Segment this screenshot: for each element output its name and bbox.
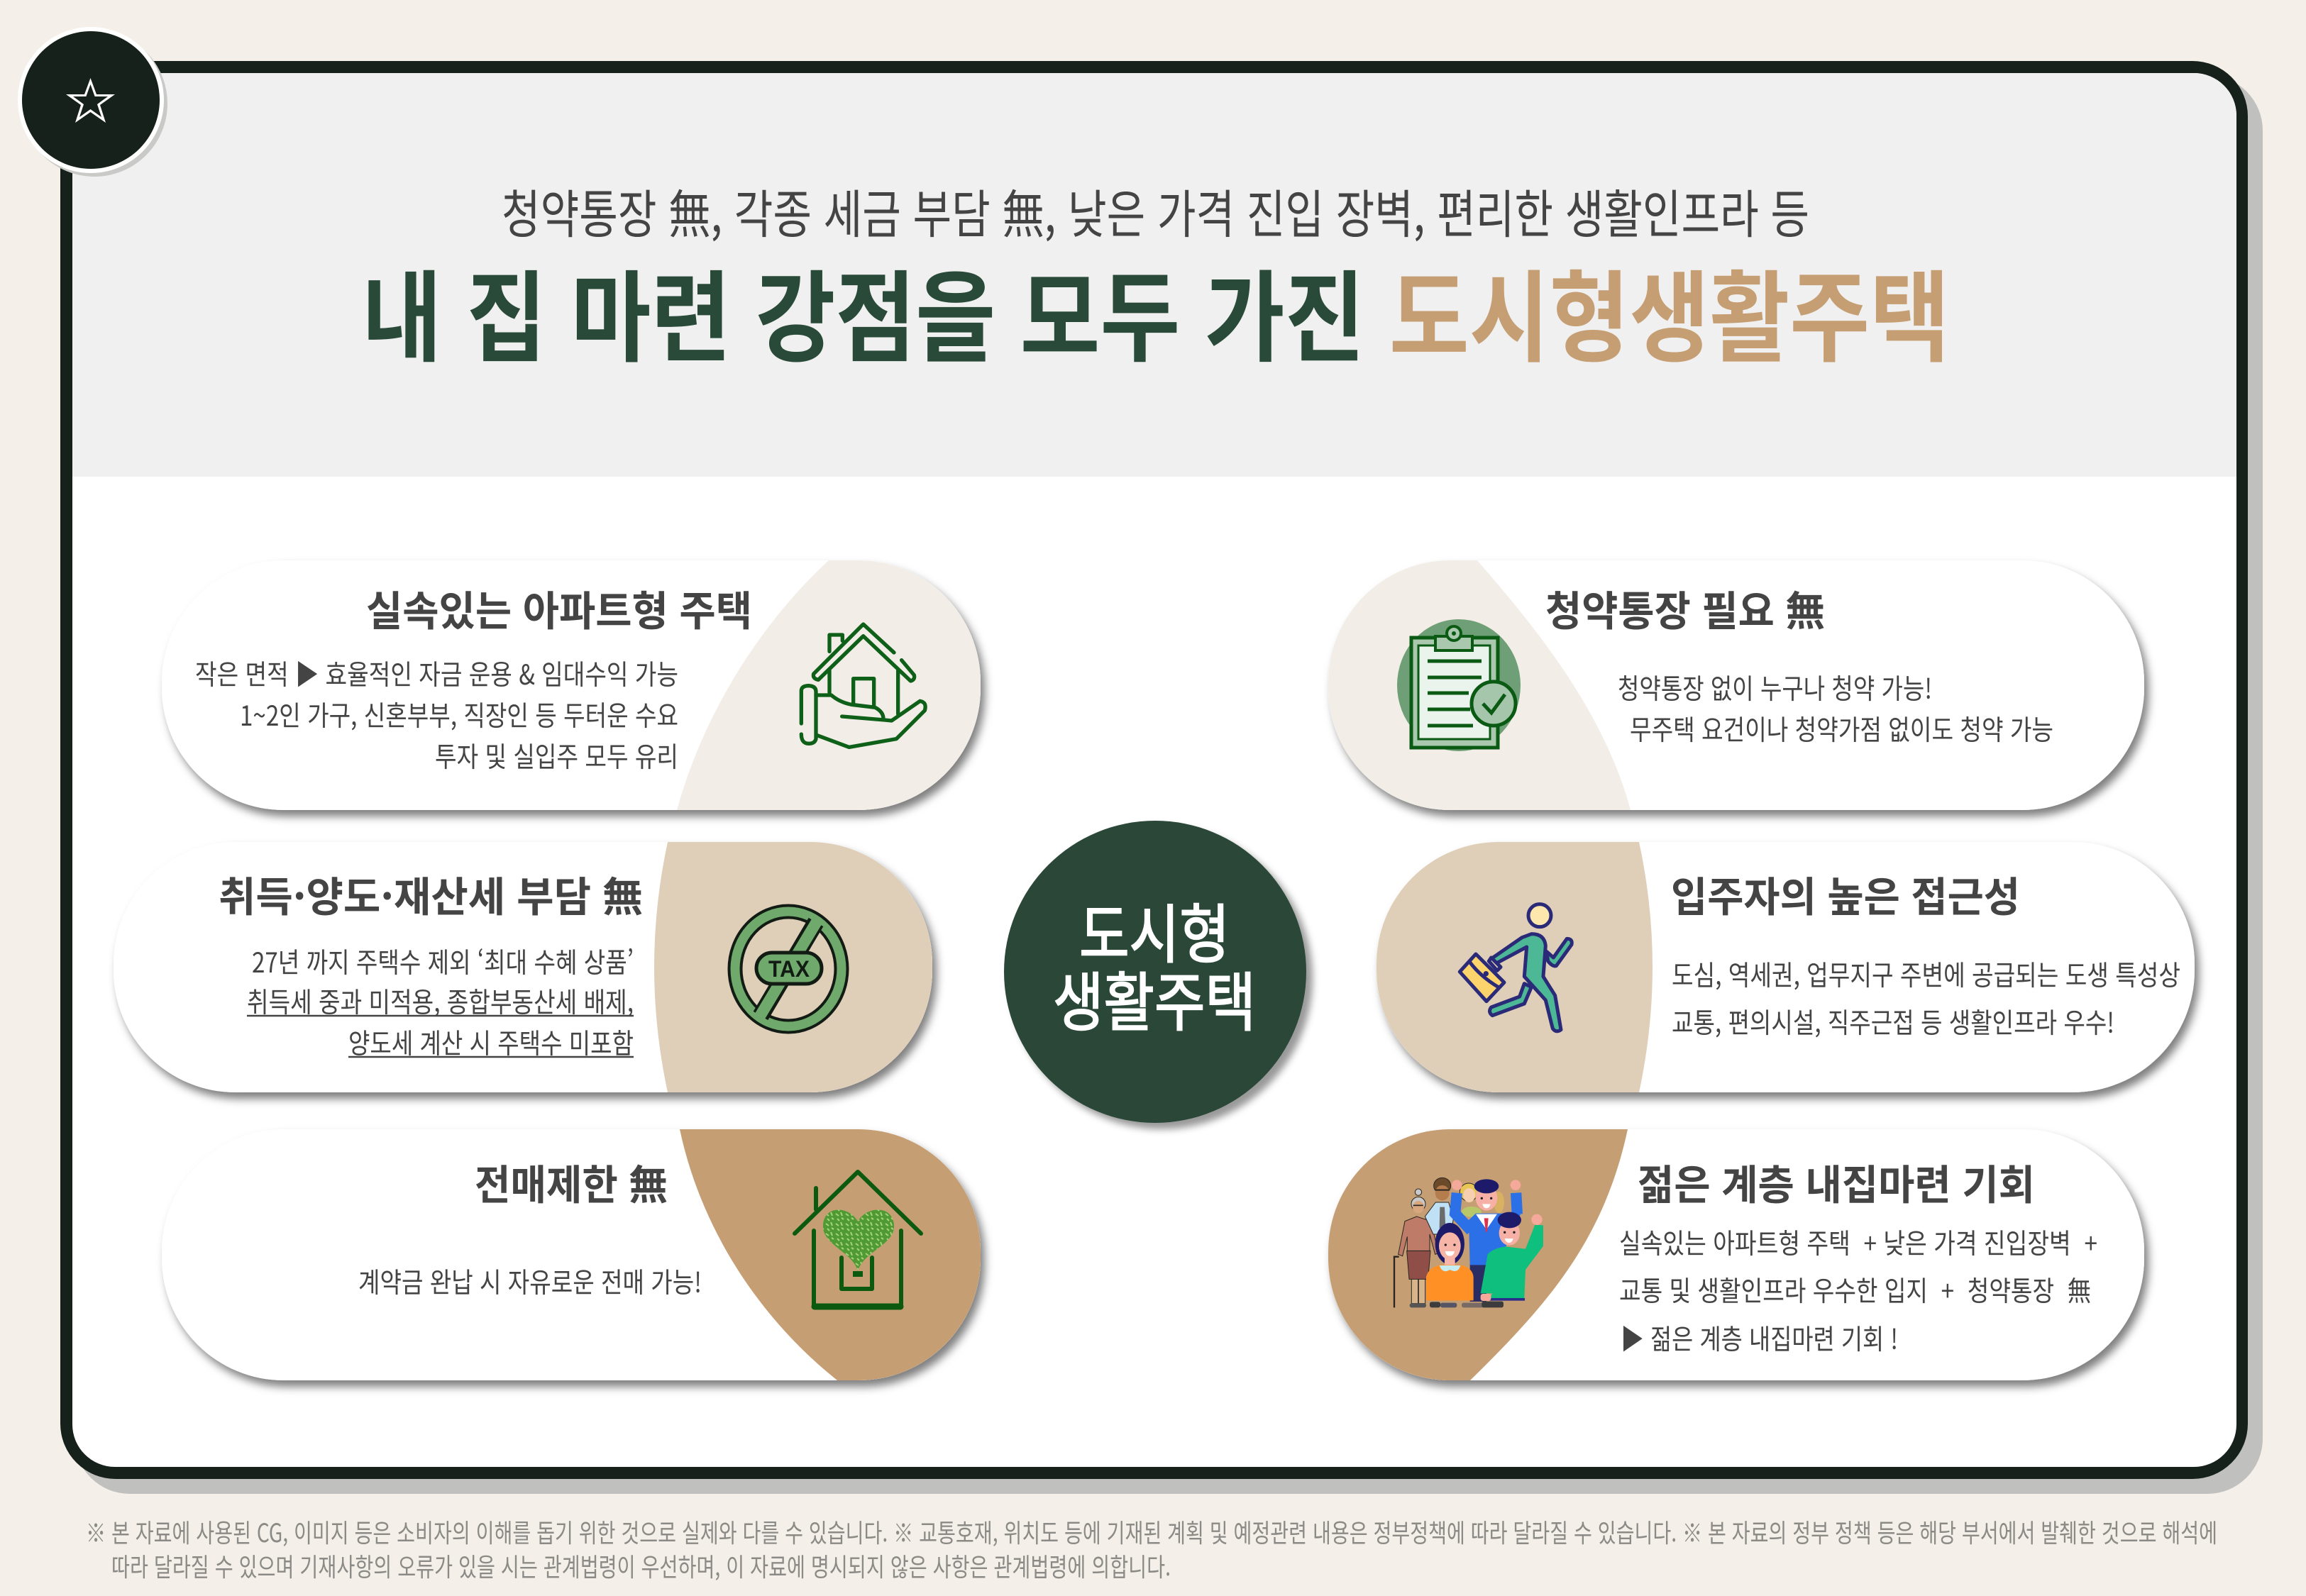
- panel: tax exemption: [114, 842, 944, 1092]
- card heading: 입주자의 높은 접근성: [1671, 864, 2020, 924]
- woman in orange: [1435, 1223, 1464, 1265]
- man in green: [1481, 1225, 1543, 1298]
- card body: 실속있는 아파트형 주택 + 낮은 가격 진입장벽 +: [1619, 1222, 2097, 1262]
- card body: [1619, 1222, 2097, 1358]
- icon: green heart house: [795, 1172, 921, 1307]
- card body: 작은 면적 ▶ 효율적인 자금 운용 & 임대수익 가능: [195, 653, 678, 693]
- card body: 1~2인 가구, 신혼부부, 직장인 등 두터운 수요: [240, 694, 678, 734]
- center label: 도시형: [1079, 883, 1230, 975]
- shoes: [1430, 1302, 1440, 1307]
- icon: group of people: [1394, 1177, 1543, 1307]
- man with glasses: [1425, 1202, 1453, 1234]
- footnote: [86, 1513, 2217, 1584]
- card body: 양도세 계산 시 주택수 미포함: [348, 1022, 634, 1062]
- heading: [362, 173, 1950, 382]
- card heading: 실속있는 아파트형 주택: [366, 578, 752, 638]
- card heading: 취득·양도·재산세 부담 無: [219, 864, 643, 924]
- subtitle: 청약통장 無, 각종 세금 부담 無, 낮은 가격 진입 장벽, 편리한 생활인프라 등: [502, 173, 1809, 248]
- panel: high accessibility: [1369, 842, 2195, 1092]
- card heading: 청약통장 필요 無: [1545, 578, 1825, 638]
- man in blue suit: [1455, 1193, 1471, 1231]
- star badge: [18, 27, 167, 177]
- center circle: [1004, 821, 1306, 1123]
- card body: 27년 까지 주택수 제외 ‘최대 수혜 상품’: [252, 941, 634, 981]
- footnote: 따라 달라질 수 있으며 기재사항의 오류가 있을 시는 관계법령이 우선하며, 이 자료에 명시되지 않은 사항은 관계법령에 의합니다.: [111, 1547, 1171, 1584]
- card body: [195, 653, 678, 775]
- panel: no resale restriction: [162, 1129, 993, 1380]
- card heading: 전매제한 無: [475, 1152, 668, 1212]
- card body: 교통 및 생활인프라 우수한 입지 + 청약통장 無: [1619, 1270, 2091, 1309]
- card body: 계약금 완납 시 자유로운 전매 가능!: [358, 1261, 702, 1301]
- blonde woman: [1462, 1207, 1482, 1217]
- panel: no subscription account required: [1320, 560, 2144, 810]
- card heading: 젊은 계층 내집마련 기회: [1638, 1152, 2035, 1212]
- card body: 취득세 중과 미적용, 종합부동산세 배제,: [247, 981, 634, 1021]
- card body: [247, 941, 634, 1062]
- center label: 생활주택: [1053, 951, 1256, 1043]
- card body: [1618, 667, 2053, 748]
- icon: running commuter: [1460, 904, 1572, 1031]
- panel: compact apartment-style housing: [162, 560, 993, 810]
- card body: 청약통장 없이 누구나 청약 가능!: [1618, 667, 1932, 707]
- card body: [1672, 954, 2180, 1041]
- card body: 교통, 편의시설, 직주근접 등 생활인프라 우수!: [1672, 1002, 2114, 1041]
- icon: no tax: TAX: [768, 956, 810, 982]
- icon: clipboard with check: [1397, 619, 1521, 751]
- card body: 무주택 요건이나 청약가점 없이도 청약 가능: [1630, 709, 2053, 748]
- icon: no tax: [735, 911, 842, 1026]
- card body: 투자 및 실입주 모두 유리: [435, 736, 678, 775]
- icon: house on hand: [801, 624, 925, 747]
- card body: ▶ 젊은 계층 내집마련 기회 !: [1621, 1318, 1898, 1358]
- old woman: [1394, 1257, 1399, 1307]
- main title: 내 집 마련 강점을 모두 가진 도시형생활주택: [362, 239, 1950, 382]
- card body: 도심, 역세권, 업무지구 주변에 공급되는 도생 특성상: [1672, 954, 2180, 994]
- panel: opportunity for young generations: [1320, 1129, 2144, 1380]
- center label: [1053, 883, 1256, 1043]
